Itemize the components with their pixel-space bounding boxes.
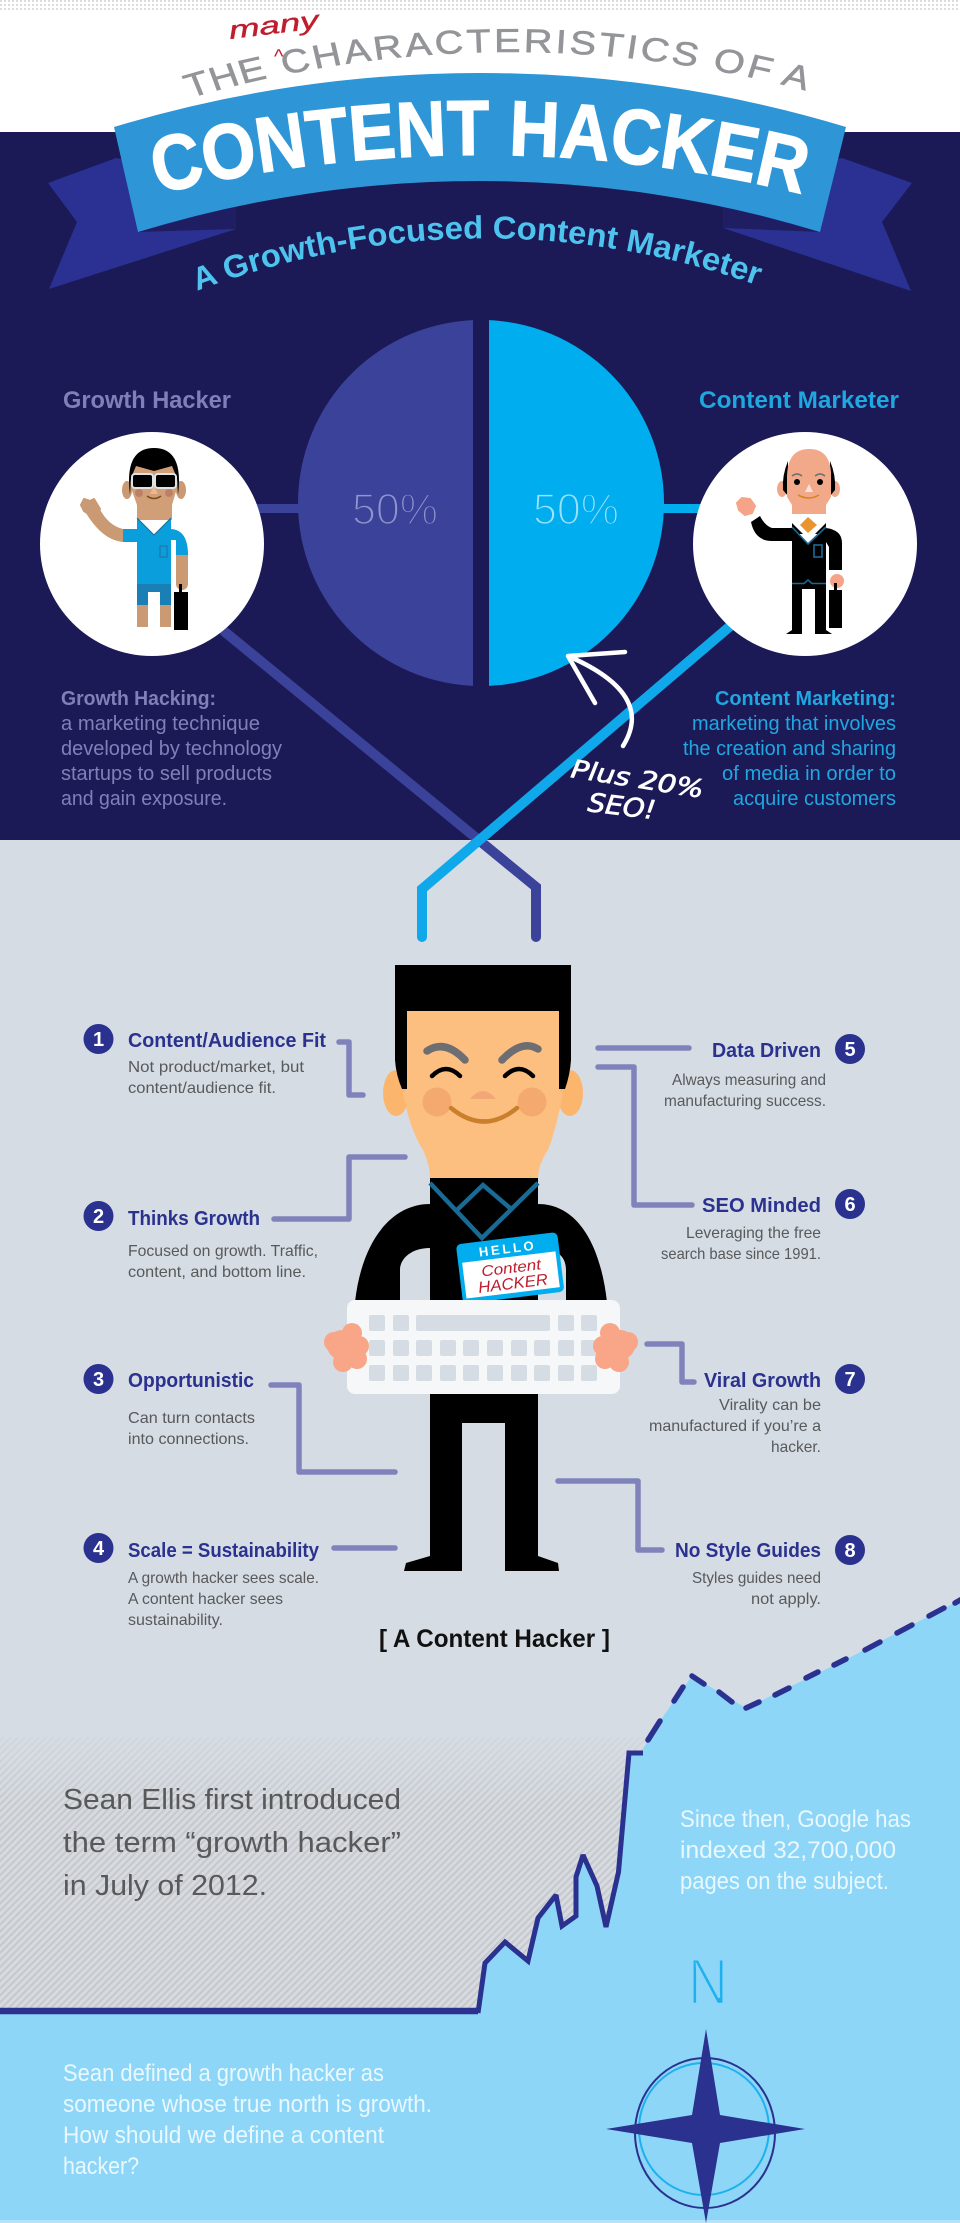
ears [777, 481, 787, 497]
eyes [794, 479, 800, 485]
head and neck [131, 465, 177, 520]
definition body: developed by technology [61, 738, 282, 760]
trait 3: 3 [93, 1369, 104, 1391]
eyebrows [792, 474, 825, 476]
heading: Growth Hacker: Growth Hacker [63, 387, 231, 414]
face and neck [403, 1011, 563, 1178]
lapels [792, 527, 826, 544]
head [787, 449, 831, 516]
line: growth hacker connector [225, 632, 536, 937]
trait 4 [84, 1533, 320, 1629]
title block [182, 6, 806, 96]
navy section background [0, 132, 960, 840]
trait text: manufacturing success. [664, 1093, 826, 1110]
pocket [814, 545, 822, 557]
grey section background [0, 840, 960, 2223]
text: since then Google: pages on the subject. [680, 1868, 889, 1895]
trait 2 [84, 1201, 318, 1281]
trait text: Focused on growth. Traffic, [128, 1243, 318, 1260]
definition body: the creation and sharing [683, 738, 896, 760]
trait heading: Data Driven [712, 1040, 821, 1062]
text: Sean defined: How should we define a content [63, 2122, 384, 2149]
compass letter N: N [688, 1945, 728, 2018]
trait text [661, 1225, 821, 1263]
keyboard [347, 1300, 620, 1394]
number badge [84, 1533, 114, 1563]
shirt [123, 518, 188, 584]
definition body: and gain exposure. [61, 788, 227, 810]
dashed line [648, 1599, 960, 1740]
heading: Content Hacker: CONTENT HACKER [152, 100, 808, 194]
mouth [798, 495, 819, 498]
white circle [693, 432, 917, 656]
trait heading: SEO Minded [702, 1195, 821, 1217]
title: The Characteristics of a: THE [182, 56, 267, 96]
text: Sean Ellis intro [63, 1784, 401, 1902]
number badge [835, 1364, 865, 1394]
text: Sean defined: hacker? [63, 2153, 139, 2180]
legs [137, 605, 148, 627]
trait text: sustainability. [128, 1612, 223, 1629]
ears [383, 1070, 409, 1116]
name badge: HACKER [477, 1271, 549, 1297]
definition body [61, 713, 282, 810]
hair [395, 965, 571, 1089]
growth chart line [0, 1599, 960, 2013]
trait text: not apply. [751, 1591, 821, 1608]
handwritten: many: many [227, 6, 322, 45]
hand waving [737, 498, 755, 515]
right hand [593, 1323, 638, 1372]
callout: plus 20% SEO: SEO! [586, 788, 657, 826]
trait text: Can turn contacts [128, 1410, 255, 1427]
definition body: a marketing technique [61, 713, 260, 735]
definition body [683, 713, 896, 810]
trait 3 [84, 1364, 255, 1448]
trait text [649, 1397, 821, 1456]
nose [470, 1091, 496, 1099]
trait text: into connections. [128, 1431, 249, 1448]
number badge [835, 1535, 865, 1565]
compass rings [635, 2058, 775, 2208]
trait 5 [664, 1034, 865, 1110]
trait 1: 1 [93, 1029, 104, 1051]
badge card [456, 1232, 564, 1304]
portrait: content marketer [693, 432, 917, 656]
badge name: Content [480, 1256, 543, 1280]
text: Sean defined: someone whose true north is growth. [63, 2091, 432, 2118]
trait text: Virality can be [719, 1397, 821, 1414]
label 50% right: 50% [533, 485, 619, 534]
trait 7: 7 [844, 1369, 856, 1391]
ribbon fold left [138, 205, 236, 232]
trousers and shoes [786, 585, 832, 634]
text: since then Google: Since then, Google has [680, 1806, 911, 1833]
tie [800, 517, 817, 533]
text: Sean Ellis intro: Sean Ellis first introduced [63, 1784, 401, 1816]
number badge [835, 1034, 865, 1064]
right arm [176, 553, 188, 583]
ribbon fold right [723, 205, 820, 232]
callout: plus 20% SEO: Plus 20% [569, 754, 706, 804]
connector lines from profiles to the content hacker [225, 622, 735, 937]
name badge [456, 1232, 564, 1304]
arrow: handwritten pointing to pie [568, 652, 632, 746]
compass [606, 1945, 805, 2223]
trait 7 [649, 1364, 865, 1456]
title: The Characteristics of a: CHARACTERISTICS [282, 28, 698, 73]
collar lines [430, 1183, 538, 1238]
definition heading: Content Marketing: [715, 688, 896, 710]
badge label: HELLO [478, 1238, 534, 1260]
trait text: Styles guides need [692, 1570, 821, 1587]
pie half: content marketer [489, 320, 664, 686]
cheeks [422, 1088, 452, 1116]
portrait: growth hacker [40, 432, 264, 656]
ribbon tail right [723, 158, 912, 291]
pie half: growth hacker [298, 320, 473, 686]
trait text [128, 1059, 305, 1097]
trait text: manufactured if you’re a [649, 1418, 821, 1435]
bottom edge strip [0, 2220, 960, 2223]
trait heading: Content/Audience Fit [128, 1030, 326, 1052]
briefcase [174, 592, 188, 630]
definition heading: Growth Hacking: [61, 688, 216, 710]
trait 2: 2 [93, 1206, 104, 1228]
trait heading: No Style Guides [675, 1540, 821, 1562]
connector bar right [655, 504, 705, 513]
trait text: Always measuring and [672, 1072, 826, 1089]
mouth [451, 1108, 517, 1122]
trait heading: Thinks Growth [128, 1208, 260, 1230]
text: since then Google: indexed 32,700,000 [680, 1837, 896, 1864]
trait 6: 6 [844, 1194, 856, 1216]
connector bar left [255, 504, 305, 513]
trait 1 [84, 1024, 326, 1097]
text block: growth hacking definition [61, 688, 282, 810]
briefcase [829, 590, 842, 628]
title: The Characteristics of a [182, 28, 806, 96]
callout connector lines [271, 1042, 694, 1550]
nose [805, 484, 813, 492]
keys [369, 1315, 597, 1381]
raised arm and suit [751, 516, 842, 585]
label 50% left: 50% [352, 485, 438, 534]
sunglasses [132, 474, 153, 488]
number badge [84, 1364, 114, 1394]
hatched panel behind chart [0, 1737, 660, 2011]
trait text: content, and bottom line. [128, 1264, 306, 1281]
trait heading: Scale = Sustainability [128, 1540, 320, 1562]
body and arms [355, 1178, 607, 1302]
trait 6 [661, 1189, 865, 1263]
callout: plus 20% SEO [569, 754, 706, 826]
trait 8: 8 [844, 1540, 856, 1562]
caret: ^ [274, 46, 284, 68]
trait text: search base since 1991. [661, 1246, 821, 1263]
number badge [835, 1189, 865, 1219]
title: The Characteristics of a: OF [716, 49, 774, 78]
text: Sean Ellis intro: the term “growth hacker” [63, 1827, 401, 1859]
trait text: A content hacker sees [128, 1591, 283, 1608]
trait 8 [675, 1535, 865, 1608]
trait text [692, 1570, 821, 1608]
white circle [40, 432, 264, 656]
lower body and legs [404, 1390, 559, 1571]
hair [129, 448, 179, 495]
eyes [432, 1069, 533, 1076]
definition body: startups to sell products [61, 763, 272, 785]
character: content hacker [324, 965, 638, 1571]
trait heading: Viral Growth [704, 1370, 821, 1392]
ribbon front [114, 73, 846, 232]
text block: content marketing definition [683, 688, 896, 810]
left hand [324, 1323, 369, 1372]
white header background [0, 0, 960, 132]
ribbon banner [48, 73, 912, 291]
trait text: A growth hacker sees scale. [128, 1570, 319, 1587]
trait text: hacker. [771, 1439, 821, 1456]
number badge [84, 1201, 114, 1231]
text: since then Google [680, 1806, 911, 1895]
right hand [830, 574, 844, 588]
trait text [128, 1243, 318, 1281]
cheeks [135, 489, 143, 497]
raised arm [82, 503, 123, 542]
collar [792, 514, 826, 540]
trait 5: 5 [844, 1039, 856, 1061]
trait 4: 4 [93, 1538, 105, 1560]
text: Sean Ellis intro: in July of 2012. [63, 1870, 267, 1902]
character caption: [ A Content Hacker ] [379, 1625, 610, 1653]
shorts [137, 584, 171, 605]
mouth [147, 496, 161, 498]
heading: Content Marketer: Content Marketer [699, 387, 899, 414]
belt line [792, 580, 826, 584]
eyebrows [427, 1046, 538, 1060]
trait text [664, 1072, 826, 1110]
nose [150, 486, 158, 494]
line: content marketer connector [422, 622, 735, 937]
text: Sean defined [63, 2060, 432, 2180]
definition body: acquire customers [733, 788, 896, 810]
definition body: of media in order to [722, 763, 896, 785]
trait text [128, 1570, 319, 1629]
title: The Characteristics of a: A [780, 64, 806, 91]
pocket [160, 546, 167, 557]
trait text: Not product/market, but [128, 1059, 305, 1076]
solid line [478, 1753, 643, 2013]
definition body: marketing that involves [692, 713, 896, 735]
text: Sean defined: Sean defined a growth hacker as [63, 2060, 384, 2087]
pie chart 50/50 [255, 320, 705, 686]
hair [783, 461, 835, 496]
trait text [128, 1410, 255, 1448]
baseline [0, 2008, 478, 2014]
trait text: Leveraging the free [686, 1225, 821, 1242]
number badge [84, 1024, 114, 1054]
ribbon tail left [48, 158, 236, 289]
growth chart area [0, 1600, 960, 2223]
compass star [606, 2029, 805, 2223]
subtitle: A Growth-Focused Content Marketer [198, 215, 762, 291]
ears [122, 481, 132, 499]
trait heading: Opportunistic [128, 1370, 254, 1392]
keyboard base [347, 1300, 620, 1394]
trait text: content/audience fit. [128, 1080, 276, 1097]
